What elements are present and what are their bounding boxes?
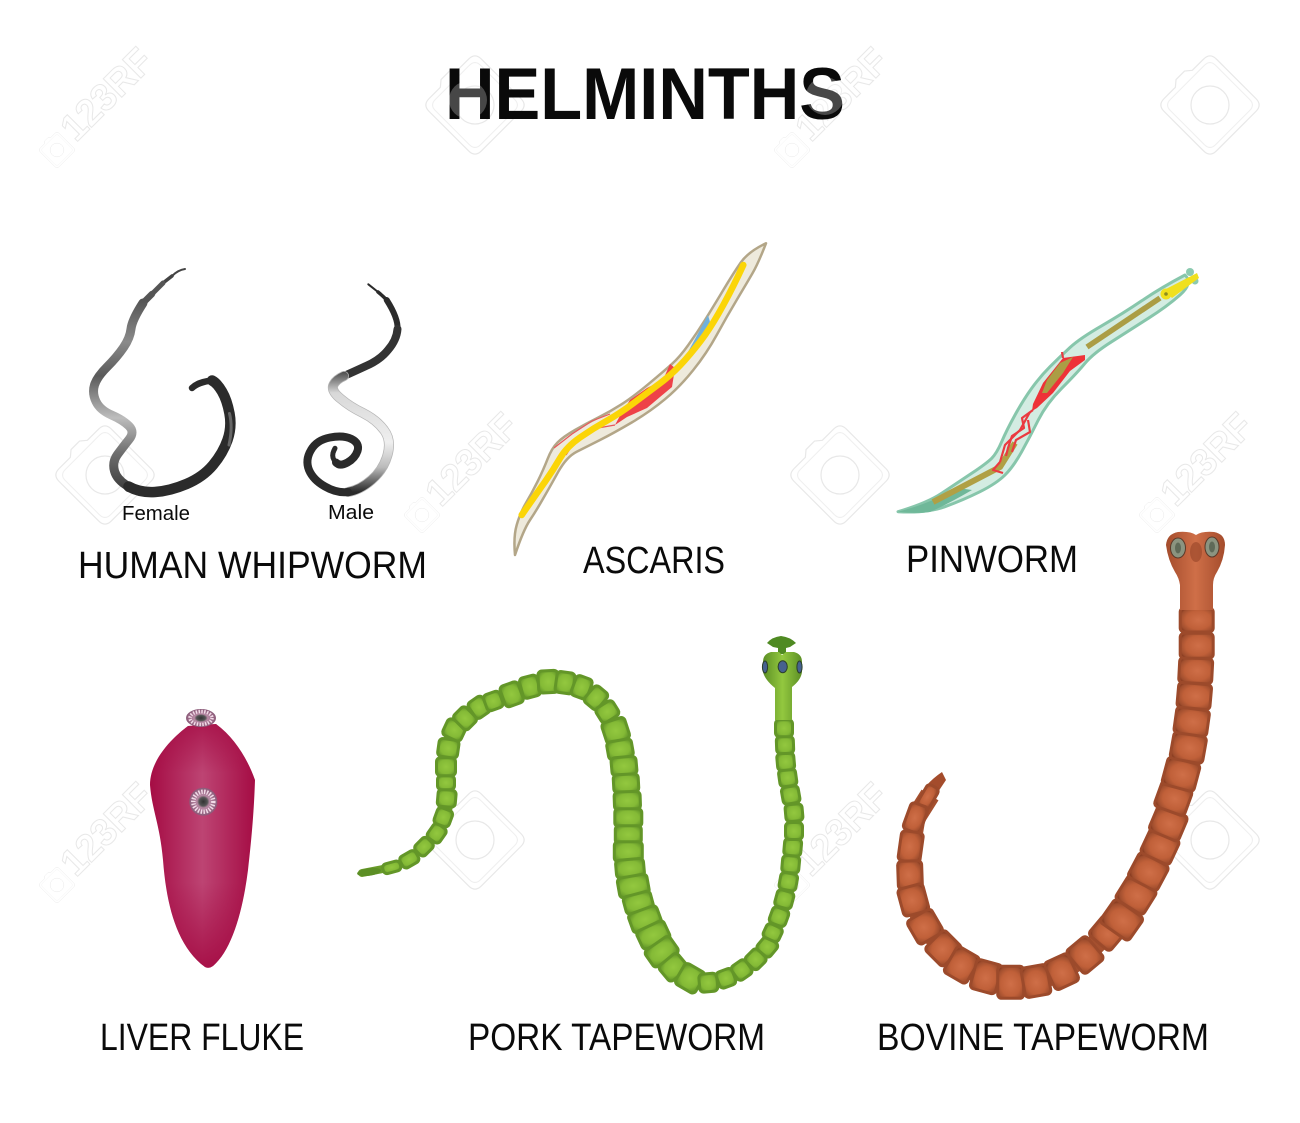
label: pinworm: PINWORM — [906, 539, 1078, 581]
label: male: Male — [328, 502, 374, 524]
title: HELMINTHS — [445, 54, 845, 135]
pinworm red vessels — [993, 352, 1063, 473]
pinworm upper gut — [1087, 298, 1160, 347]
female whipworm — [94, 269, 231, 492]
male whipworm — [307, 284, 398, 492]
ascaris red organ — [615, 364, 675, 425]
bovine tapeworm — [897, 532, 1225, 998]
pinworm lower gut — [933, 443, 1015, 502]
liver fluke — [150, 709, 255, 968]
fluke oral sucker — [186, 709, 216, 727]
watermarks: 123RF — [418, 405, 527, 514]
ascaris worm — [514, 243, 766, 555]
label: human whipworm: HUMAN WHIPWORM — [78, 545, 427, 587]
ascaris yellow gut — [522, 265, 743, 515]
pinworm olive intestine — [1042, 357, 1073, 393]
label: female: Female — [122, 503, 190, 525]
pork tapeworm head — [762, 636, 802, 720]
watermarks — [37, 40, 1262, 904]
label: bovine tapeworm: BOVINE TAPEWORM — [877, 1017, 1209, 1059]
watermarks: 123RF — [53, 40, 162, 149]
watermarks: 123RF — [788, 775, 897, 884]
pinworm yellow head — [1164, 273, 1199, 298]
label: liver fluke: LIVER FLUKE — [100, 1017, 304, 1059]
label: pork tapeworm: PORK TAPEWORM — [468, 1017, 765, 1059]
pinworm red organ — [1032, 355, 1085, 411]
watermarks: 123RF — [788, 40, 897, 149]
ascaris fine vessels — [554, 414, 615, 455]
watermarks: 123RF — [53, 775, 162, 884]
bovine tapeworm head — [1166, 532, 1225, 610]
pork tapeworm — [357, 636, 803, 994]
ascaris blue organ — [688, 315, 710, 352]
watermarks: 123RF — [1153, 405, 1262, 514]
pinworm — [898, 268, 1199, 513]
label: ascaris: ASCARIS — [583, 540, 725, 582]
fluke ventral sucker — [189, 788, 217, 816]
